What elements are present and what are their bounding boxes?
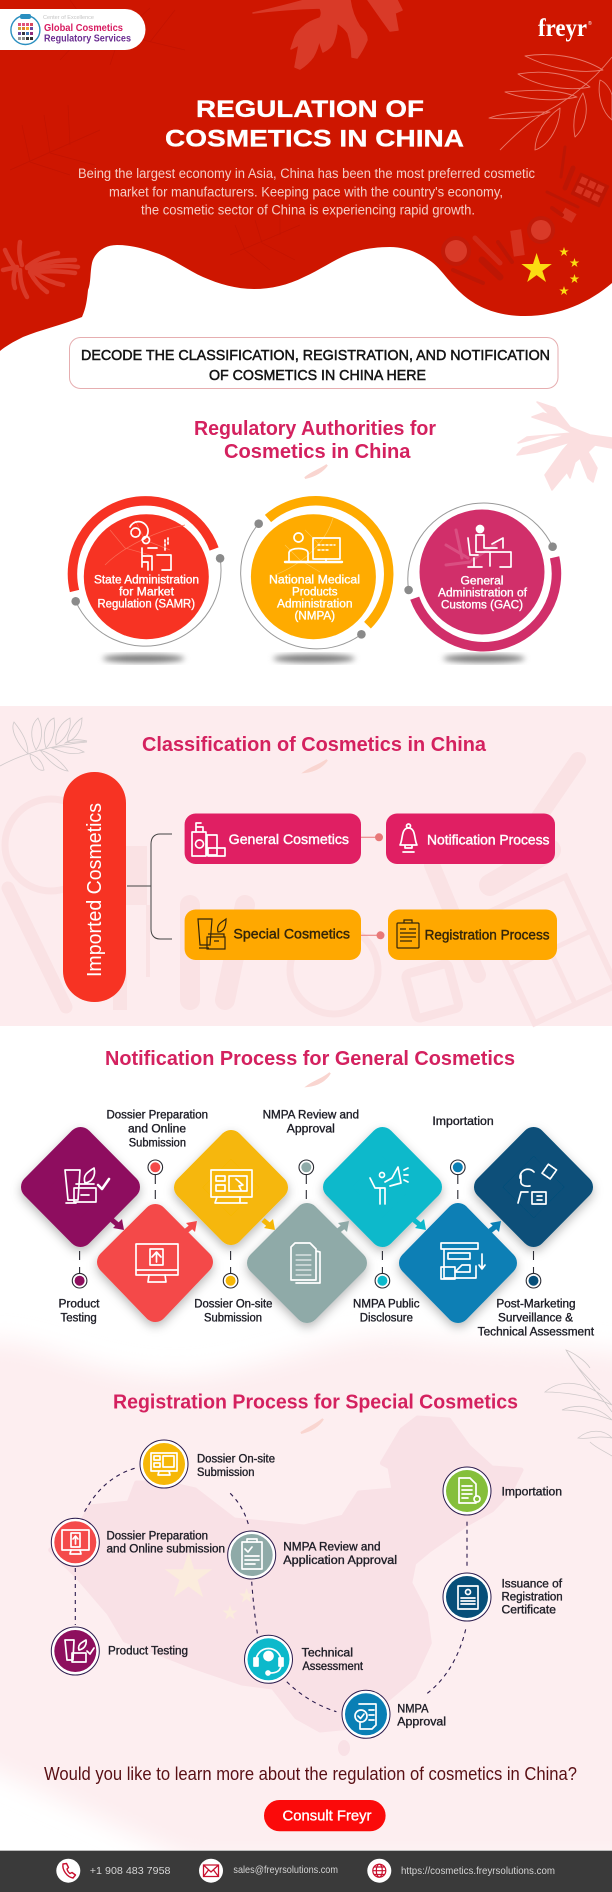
panel: regulatory authorities <box>71 402 612 662</box>
box: notification process: Notification Process <box>427 832 550 847</box>
soft pink background <box>0 1338 612 1860</box>
step labels: Dossier On-site <box>194 1299 272 1311</box>
feather ornament <box>301 1419 323 1433</box>
connector dot <box>361 833 383 841</box>
card: SAMR: for Market <box>119 586 175 598</box>
icon: monitor form <box>211 1170 252 1203</box>
node: issuance of registration certificate: Issuance of <box>502 1578 563 1590</box>
decorative cosmetics silhouettes <box>441 147 610 283</box>
node: dossier on-site submission: Dossier On-site <box>197 1454 275 1466</box>
intro paragraph <box>78 166 535 218</box>
step 2: dossier preparation <box>109 1216 201 1310</box>
node: dossier preparation <box>51 1518 225 1566</box>
call to action <box>44 1763 577 1831</box>
node: dossier preparation: and Online submission <box>106 1544 225 1556</box>
branch connector <box>127 834 172 939</box>
icon: tube and cream <box>198 919 226 949</box>
faint cosmetics background <box>5 760 612 1023</box>
step labels: Submission <box>129 1138 186 1150</box>
callout: decode box: DECODE THE CLASSIFICATION, REGISTRATION, AND NOTIFICATION <box>81 348 550 364</box>
node: importation <box>443 1467 562 1515</box>
step labels: NMPA Review and <box>263 1110 359 1122</box>
freyr logo: freyr <box>538 15 587 42</box>
icon: certificate <box>458 1586 478 1609</box>
logo pill: Global Cosmetics Regulatory Services: Center of Excellence <box>43 15 94 21</box>
step labels <box>58 1110 595 1339</box>
decorative coral leaf top <box>253 0 402 69</box>
decorative line leaf <box>0 718 87 771</box>
step labels: Testing <box>60 1313 97 1325</box>
node: issuance of registration certificate: Registration <box>502 1592 563 1604</box>
card: NMPA: National Medical <box>269 574 360 586</box>
node: NMPA review: NMPA Review and <box>283 1542 380 1554</box>
node: issuance of registration certificate <box>443 1573 563 1621</box>
icon: headset and gear <box>254 1648 283 1675</box>
step labels: Approval <box>287 1124 335 1136</box>
feather ornament <box>305 760 327 772</box>
step 6: importation <box>411 1215 505 1311</box>
decorative palm leaf left <box>3 242 78 297</box>
icon: monitor upload <box>62 1530 89 1554</box>
box: notification process <box>386 814 555 864</box>
step labels: Disclosure <box>360 1313 413 1325</box>
heading: Cosmetics in China <box>224 441 411 463</box>
icon: cosmetics <box>65 1640 94 1662</box>
box: registration process <box>388 910 557 960</box>
card: GAC <box>404 503 557 662</box>
icon: stack of documents <box>291 1243 320 1283</box>
card: NMPA: Administration <box>277 598 352 610</box>
node: dossier on-site submission: Submission <box>197 1467 254 1479</box>
icon: person with megaphone <box>370 1167 408 1204</box>
step labels: Submission <box>204 1313 262 1325</box>
title <box>165 96 464 152</box>
node: product testing: Product Testing <box>108 1646 188 1658</box>
contact: website: https://cosmetics.freyrsolutions.com <box>401 1865 555 1877</box>
step labels: Dossier Preparation <box>106 1110 208 1122</box>
callout: decode box: OF COSMETICS IN CHINA HERE <box>209 368 426 384</box>
card: GAC: Administration of <box>438 588 528 600</box>
contact: email: sales@freyrsolutions.com <box>233 1864 338 1876</box>
node: importation: Importation <box>502 1486 562 1498</box>
icon: clipboard <box>397 920 419 948</box>
heading: Classification of Cosmetics in China <box>142 734 487 756</box>
node: NMPA approval: NMPA <box>397 1704 429 1716</box>
step labels: Importation <box>432 1116 494 1128</box>
step labels: Technical Assessment <box>478 1327 595 1339</box>
intro paragraph: market for manufacturers. Keeping pace with the country's economy, <box>109 184 503 200</box>
icon: clipboard <box>242 1539 262 1569</box>
red wave background <box>0 0 612 351</box>
heading: Notification Process for General Cosmetics <box>105 1048 515 1070</box>
card: NMPA <box>241 501 389 662</box>
icon: agent and document <box>518 1164 557 1204</box>
map of China <box>51 1418 521 1756</box>
node: technical assessment: Technical <box>302 1648 353 1660</box>
node: dossier preparation: Dossier Preparation <box>106 1530 208 1542</box>
step 1: product testing <box>33 1139 128 1235</box>
button: consult freyr <box>264 1800 386 1831</box>
card: GAC: Customs (GAC) <box>441 600 523 612</box>
line art leaf branch right <box>489 55 612 150</box>
card: NMPA: Products <box>292 586 338 598</box>
title: COSMETICS IN CHINA <box>165 126 464 152</box>
connector dot <box>361 931 384 939</box>
contact: phone <box>56 1859 171 1883</box>
icon: cosmetics with check <box>65 1168 109 1203</box>
step 7: post-marketing surveillance <box>486 1139 581 1235</box>
decorative line leaf <box>545 1350 612 1456</box>
panel: notification process <box>0 1048 612 1860</box>
contact: website <box>367 1859 555 1883</box>
card: SAMR: State Administration <box>94 574 199 586</box>
contact: email <box>199 1859 338 1883</box>
dashed connectors <box>75 1468 467 1712</box>
heading: Regulatory Authorities for <box>194 418 436 440</box>
button: consult freyr: Consult Freyr <box>282 1808 372 1824</box>
icon: monitor <box>151 1453 177 1475</box>
China flag stars <box>521 247 579 295</box>
freyr logo: ® <box>588 20 592 27</box>
step labels: NMPA Public <box>353 1299 420 1311</box>
card: SAMR <box>71 501 224 662</box>
timeline pins <box>72 1160 541 1288</box>
node: NMPA approval <box>342 1690 446 1738</box>
node: issuance of registration certificate: Certificate <box>502 1605 556 1617</box>
panel: hero banner <box>0 0 612 351</box>
icon: person at computer <box>285 533 342 562</box>
heading: Registration Process for Special Cosmetics <box>113 1391 518 1413</box>
icon: document with badge <box>355 1704 376 1729</box>
card: SAMR: Regulation (SAMR) <box>98 598 195 610</box>
panel: registration process <box>51 1350 612 1756</box>
logo pill: Global Cosmetics Regulatory Services <box>0 9 145 50</box>
faint line leaves <box>10 0 300 270</box>
imported cosmetics pill <box>63 772 126 1002</box>
title: REGULATION OF <box>196 96 424 123</box>
imported cosmetics pill: Imported Cosmetics <box>84 803 106 977</box>
contact: phone: +1 908 483 7958 <box>90 1865 171 1877</box>
footer <box>0 1850 612 1892</box>
step labels: Post-Marketing <box>496 1299 576 1311</box>
intro paragraph: Being the largest economy in Asia, China has been the most preferred cosmetic <box>78 166 535 181</box>
box: general cosmetics: General Cosmetics <box>229 832 349 847</box>
decorative pink leaf <box>517 402 612 490</box>
node: product testing <box>51 1627 188 1675</box>
box: special cosmetics: Special Cosmetics <box>233 927 350 942</box>
callout: decode box <box>70 338 558 388</box>
logo pill: Global Cosmetics Regulatory Services: Global Cosmetics <box>44 23 123 34</box>
box: special cosmetics <box>185 910 361 960</box>
step 3: dossier on-site submission <box>186 1142 276 1233</box>
box: registration process: Registration Process <box>425 927 550 942</box>
heading <box>194 418 436 463</box>
card: GAC: General <box>460 576 504 588</box>
card: NMPA: (NMPA) <box>294 610 335 622</box>
node: NMPA review <box>228 1531 397 1579</box>
intro paragraph: the cosmetic sector of China is experiencing rapid growth. <box>141 202 475 218</box>
step labels: Product <box>58 1298 100 1310</box>
box: general cosmetics <box>185 814 361 864</box>
icon: box warehouse <box>441 1243 485 1279</box>
node: NMPA approval: Approval <box>397 1717 446 1729</box>
icon: bottles <box>192 823 225 856</box>
logo pill: Global Cosmetics Regulatory Services: Regulatory Services <box>44 34 131 44</box>
step labels: Surveillance & <box>498 1313 573 1325</box>
step labels: and Online <box>128 1124 186 1136</box>
step 5: NMPA public disclosure <box>335 1139 430 1235</box>
node: NMPA review: Application Approval <box>283 1555 397 1567</box>
feather ornament <box>308 1073 330 1086</box>
icon: person with laptop <box>468 526 511 567</box>
panel: classification of cosmetics <box>0 706 612 1026</box>
node: technical assessment <box>244 1635 364 1683</box>
feather ornament <box>305 465 327 478</box>
node: dossier on-site submission <box>140 1440 275 1488</box>
icon: officer at desk with gear <box>130 522 171 570</box>
icon: document <box>459 1478 480 1503</box>
icon: monitor with upload <box>136 1244 178 1282</box>
flow arrows <box>112 1219 501 1232</box>
icon: bell <box>400 824 417 852</box>
node: technical assessment: Assessment <box>302 1661 364 1673</box>
step 4: dossier on-site review <box>259 1215 355 1311</box>
